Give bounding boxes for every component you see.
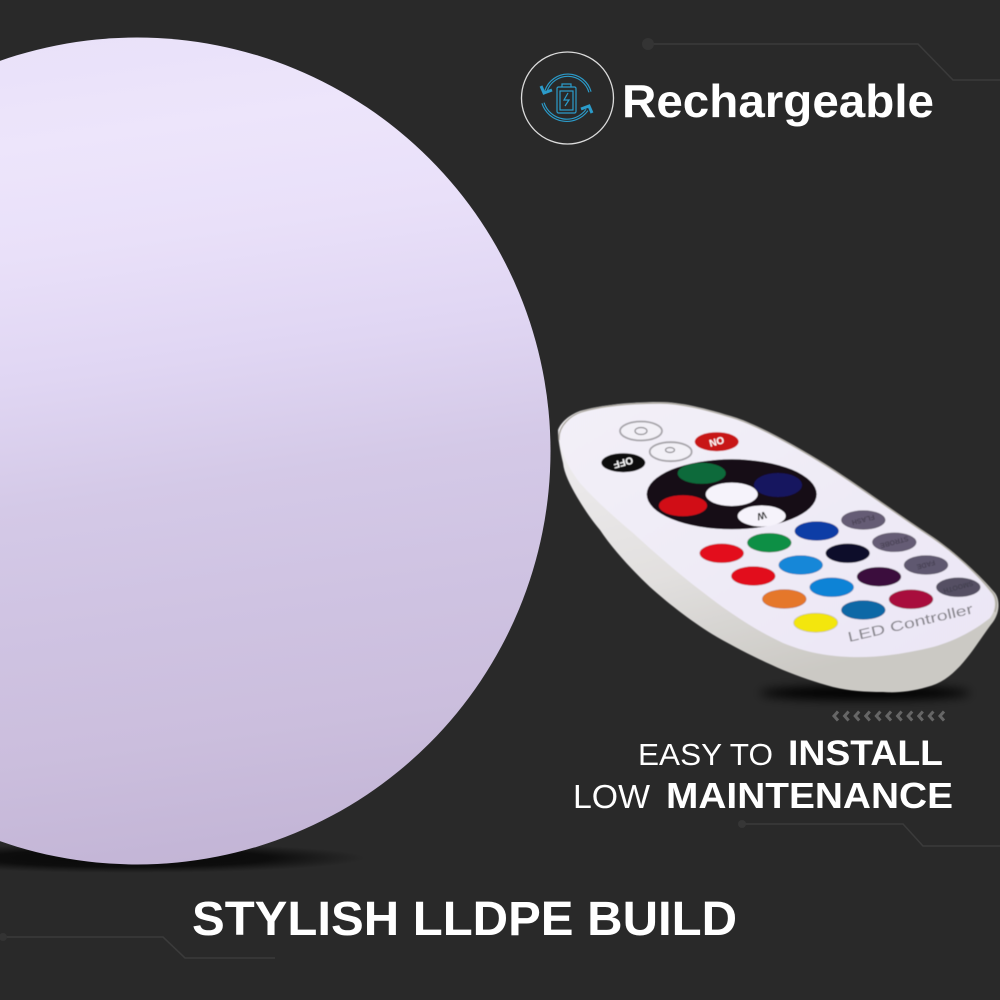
colour wheel: W [755, 508, 767, 522]
mode button labels: SMOOTH [942, 579, 974, 594]
text: easy to install, low maintenance: INSTALL [788, 734, 943, 773]
icon: rechargeable battery [522, 52, 614, 144]
text: easy to install, low maintenance: LOW [573, 778, 651, 815]
power and brightness buttons [601, 422, 739, 472]
remote label: LED Controller [846, 600, 975, 645]
shadow under sphere [0, 843, 365, 873]
text: easy to install, low maintenance: EASY TO [638, 737, 773, 772]
sphere lamp [0, 38, 550, 864]
text: easy to install, low maintenance [573, 734, 953, 816]
heading: stylish lldpe build: STYLISH LLDPE BUILD [192, 893, 737, 946]
power and brightness buttons: OFF [612, 454, 634, 470]
colour buttons [700, 510, 980, 632]
remote control [558, 402, 999, 692]
text: easy to install, low maintenance: MAINTENANCE [666, 775, 953, 816]
remote face [559, 404, 995, 657]
heading: rechargeable: Rechargeable [622, 75, 934, 127]
power and brightness buttons: ON [708, 433, 725, 448]
mode button labels: FADE [916, 558, 936, 570]
mode button labels: STROBE [879, 534, 909, 549]
shadow under remote [760, 686, 970, 700]
mode button labels: FLASH [851, 513, 875, 525]
colour wheel [647, 459, 817, 529]
remote body [558, 402, 999, 692]
mode button labels [851, 513, 974, 594]
